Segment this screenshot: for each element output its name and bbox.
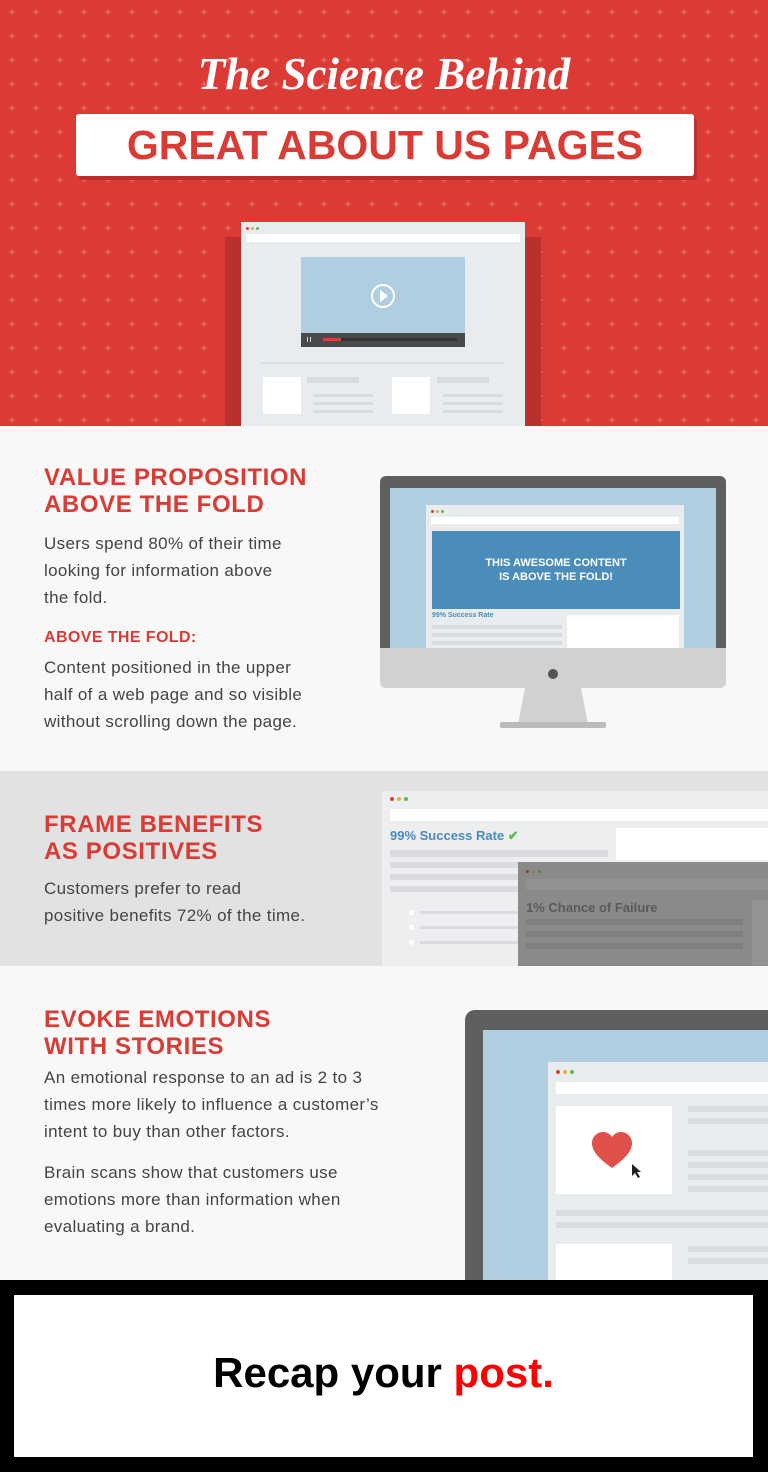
body text [44, 879, 305, 925]
heading [44, 1006, 271, 1060]
heading [44, 464, 307, 518]
content banner [432, 531, 680, 609]
footer recap [0, 1280, 768, 1472]
definition [44, 658, 302, 731]
monitor illustration: 99% Success Rate [432, 612, 493, 619]
section 3: evoke emotions [0, 966, 768, 1280]
video player [301, 257, 465, 347]
body text 1 [44, 1068, 379, 1141]
success label: 99% Success Rate ✔ [390, 828, 519, 843]
heading: FRAME BENEFITS [44, 811, 263, 838]
monitor illustration [380, 476, 726, 728]
body text: Users spend 80% of their time [44, 534, 282, 553]
content banner: THIS AWESOME CONTENT [485, 557, 627, 569]
footer recap: Recap your post. [213, 1349, 554, 1396]
section 2: frame benefits [0, 771, 768, 966]
section 1: value proposition [44, 468, 726, 730]
heading [44, 811, 263, 865]
heart card [556, 1106, 672, 1194]
body text: Customers prefer to read [44, 879, 241, 898]
browser mockup with video [225, 222, 541, 426]
failure window: 1% Chance of Failure [526, 900, 657, 915]
body text: looking for information above [44, 561, 272, 580]
browser comparison illustration [382, 791, 768, 966]
body text 1: intent to buy than other factors. [44, 1122, 290, 1141]
body text: positive benefits 72% of the time. [44, 906, 305, 925]
body text 2: emotions more than information when [44, 1190, 341, 1209]
heading: ABOVE THE FOLD [44, 491, 264, 518]
heading: WITH STORIES [44, 1033, 224, 1060]
laptop illustration [465, 1010, 768, 1280]
body text 1: An emotional response to an ad is 2 to 3 [44, 1068, 362, 1087]
subheading: ABOVE THE FOLD: [44, 629, 197, 646]
content banner: IS ABOVE THE FOLD! [499, 571, 613, 583]
definition: Content positioned in the upper [44, 658, 291, 677]
body text 2: Brain scans show that customers use [44, 1163, 338, 1182]
title script: The Science Behind [198, 49, 570, 99]
header panel [0, 0, 768, 426]
title banner [76, 114, 694, 176]
heading: VALUE PROPOSITION [44, 464, 307, 491]
definition: half of a web page and so visible [44, 685, 302, 704]
definition: without scrolling down the page. [44, 712, 297, 731]
failure window [518, 862, 768, 966]
title banner: GREAT ABOUT US PAGES [127, 122, 643, 168]
body text 1: times more likely to influence a customer’s [44, 1095, 379, 1114]
body text 2 [44, 1163, 341, 1236]
body text 2: evaluating a brand. [44, 1217, 195, 1236]
heading: AS POSITIVES [44, 838, 218, 865]
body text [44, 534, 282, 607]
body text: the fold. [44, 588, 108, 607]
heading: EVOKE EMOTIONS [44, 1006, 271, 1033]
